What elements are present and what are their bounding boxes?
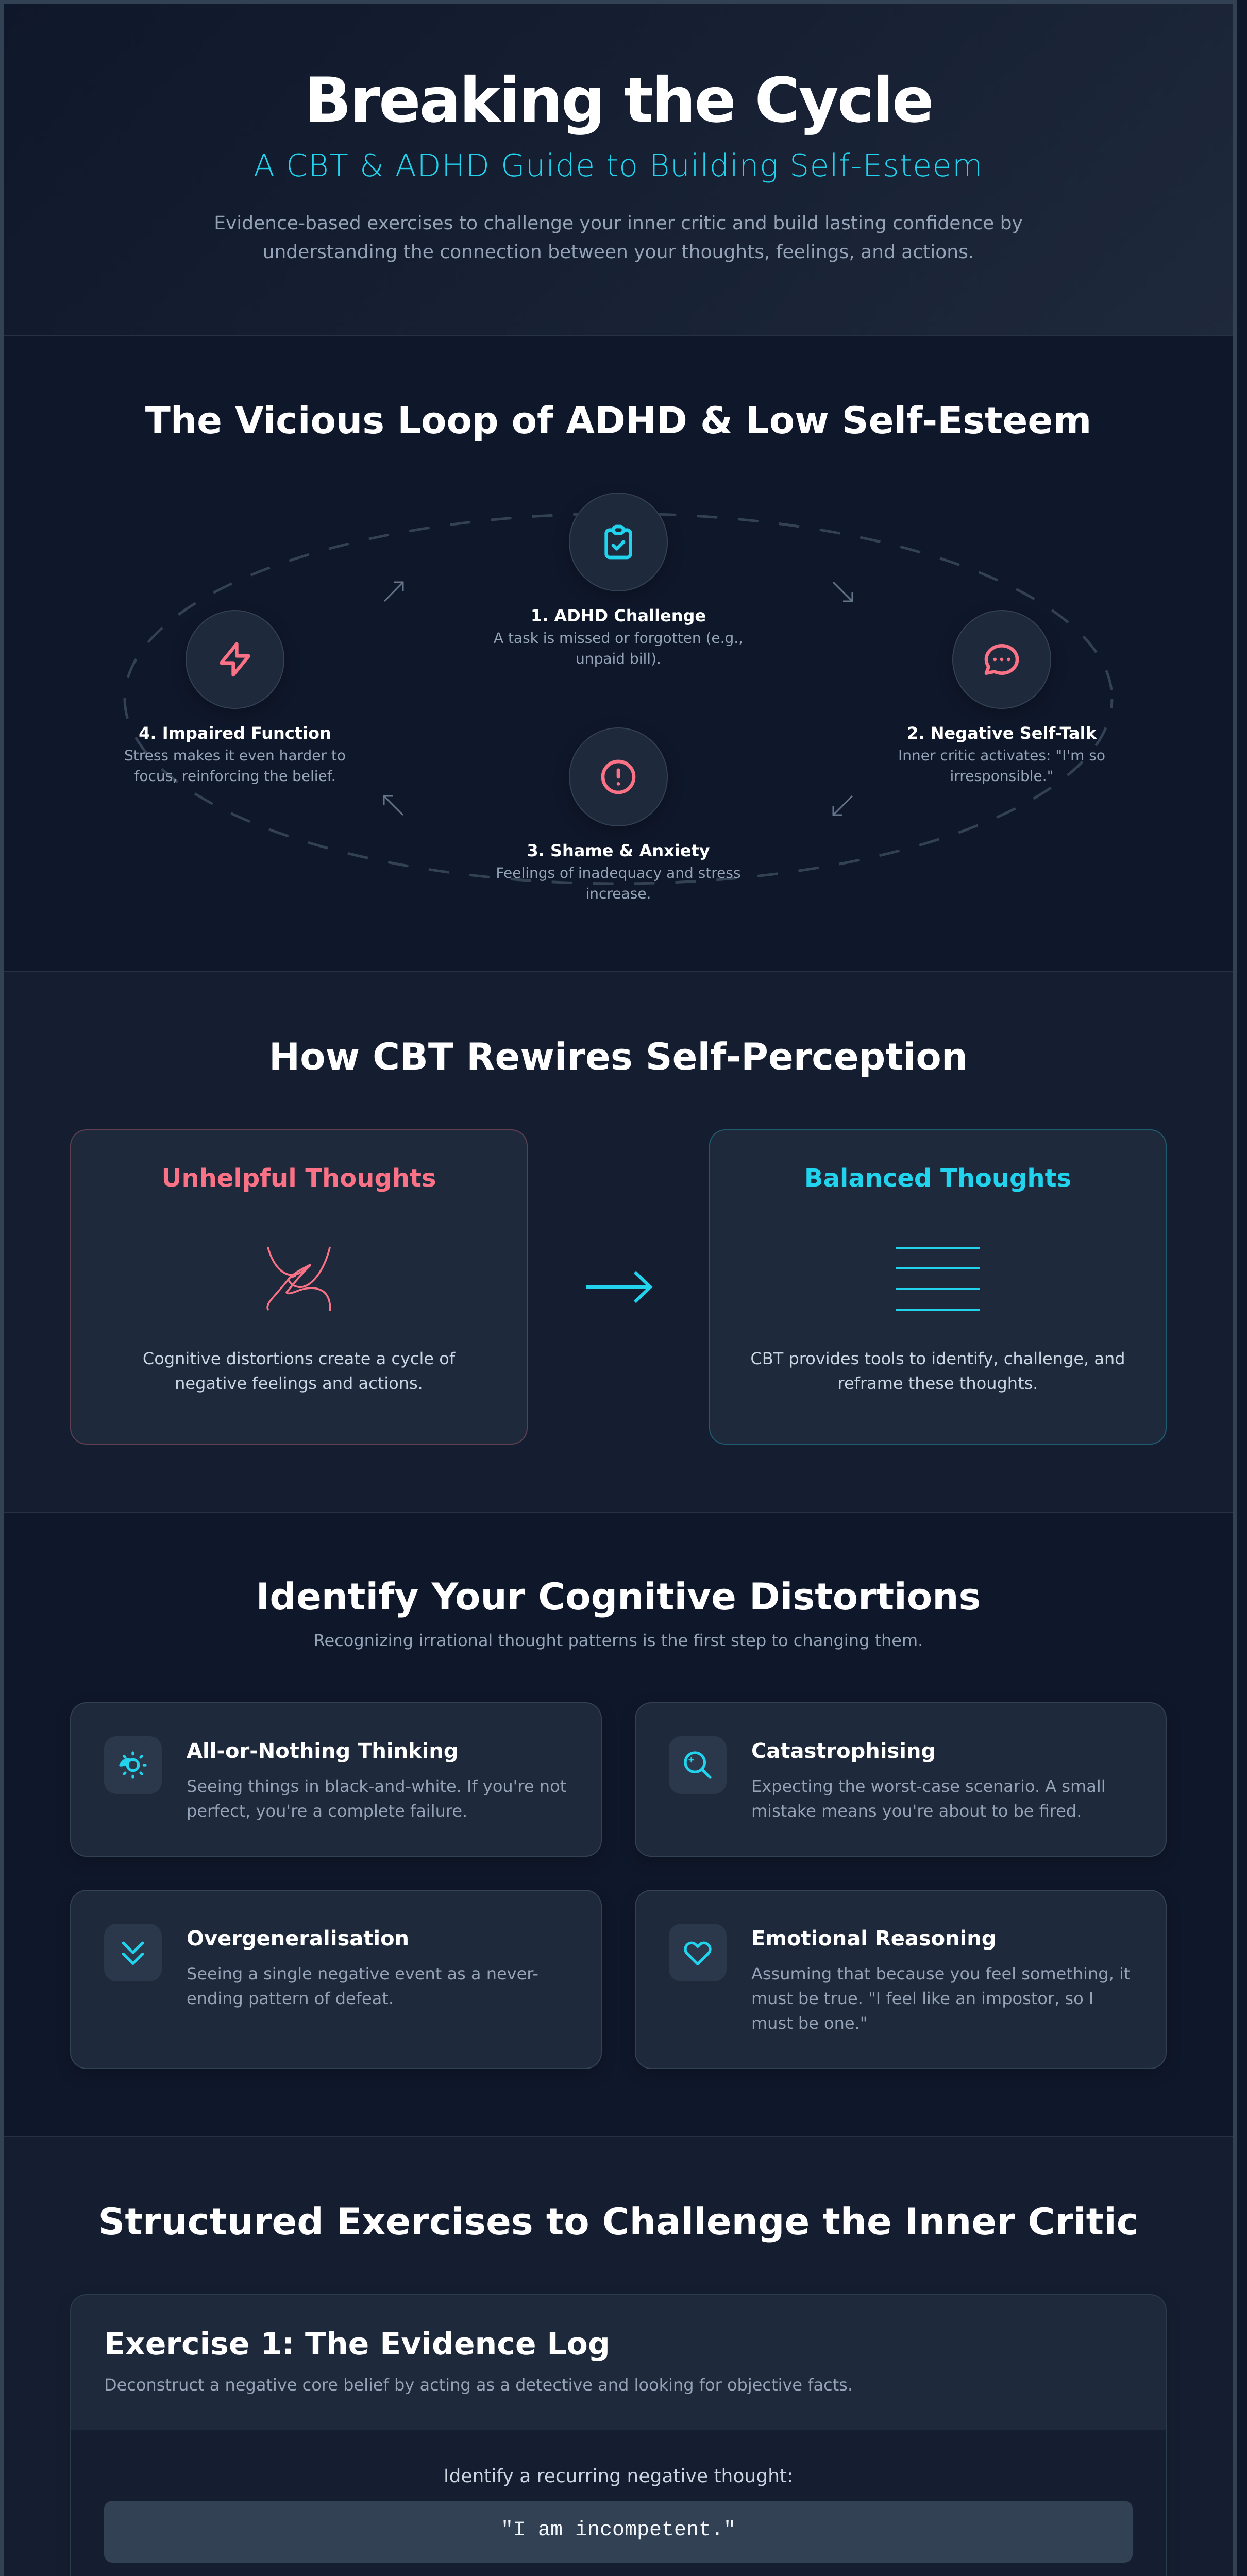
exercise 1: evidence log [70,2294,1167,2576]
exercise 1 description: Deconstruct a negative core belief by acting as a detective and looking for objective facts. [104,2375,853,2395]
subtitle: A CBT & ADHD Guide to Building Self-Esteem [254,148,983,184]
icon: double chevron [104,1924,162,1981]
negative thought box [104,2501,1133,2563]
panel: cognitive distortions [0,1513,1237,2137]
icon: half sun [104,1736,162,1794]
card text: Expecting the worst-case scenario. A small [751,1776,1106,1796]
panel: vicious loop [0,336,1237,972]
card: overgeneralisation [70,1890,602,2069]
card text: Assuming that because you feel something, it [751,1964,1130,1984]
step 4 text [124,747,346,785]
step 2 title: 2. Negative Self-Talk [907,723,1097,743]
step 4 text: Stress makes it even harder to [124,747,346,764]
card title: Catastrophising [751,1739,936,1763]
heading: exercises: Structured Exercises to Challenge the Inner Critic [98,2200,1138,2243]
card text: must be true. "I feel like an impostor, so I [751,1989,1093,2008]
card text: Seeing things in black-and-white. If you're not [187,1776,566,1796]
intro text: understanding the connection between your thoughts, feelings, and actions. [263,242,974,263]
card: catastrophising [635,1702,1167,1857]
intro text [214,213,1023,263]
step 1 title: 1. ADHD Challenge [531,606,706,625]
card text: Cognitive distortions create a cycle of [143,1349,455,1368]
card text: Seeing a single negative event as a never- [187,1964,538,1984]
step 4: impaired function [124,610,346,785]
card text: perfect, you're a complete failure. [187,1801,467,1821]
panel: how CBT rewires [0,972,1237,1513]
step 2: negative self-talk [898,610,1105,785]
step 3 title: 3. Shame & Anxiety [527,841,710,860]
step 2 text [898,747,1105,785]
icon: tangled scribble [266,1247,331,1311]
exercise 1 header [70,2294,1167,2430]
card: unhelpful thoughts [70,1129,528,1445]
card text: ending pattern of defeat. [187,1989,394,2008]
card text [751,1961,1130,2036]
arrow: step 3 to 4 [383,795,403,816]
step 1 text: A task is missed or forgotten (e.g., [494,630,743,647]
icon: exclamation circle [569,727,668,826]
step 3 text: Feelings of inadequacy and stress [496,865,741,882]
card heading: Unhelpful Thoughts [161,1164,436,1193]
card title: Emotional Reasoning [751,1927,996,1951]
heading: distortions: Identify Your Cognitive Distortions [256,1575,981,1618]
intro text: Evidence-based exercises to challenge your inner critic and build lasting confidence by [214,213,1023,234]
icon: chat bubble [952,610,1051,709]
arrow: step 4 to 1 [384,581,404,602]
loop diagram [124,493,1113,902]
step 1 text: unpaid bill). [576,650,661,667]
icon: lightning bolt [186,610,284,709]
heading: CBT: How CBT Rewires Self-Perception [269,1035,968,1078]
card title: All-or-Nothing Thinking [187,1739,458,1763]
icon: ordered lines [896,1247,980,1311]
step 1 text [494,630,743,667]
card text [187,1776,566,1821]
step 3: shame and anxiety [496,727,741,902]
step 3 text: increase. [586,885,651,902]
icon: clipboard check [569,493,668,591]
prompt: negative thought: Identify a recurring negative thought: [444,2466,793,2486]
card text: must be one." [751,2013,867,2033]
icon: heart [669,1924,727,1981]
panel: header [0,4,1237,336]
card text: reframe these thoughts. [838,1374,1038,1393]
step 4 text: focus, reinforcing the belief. [134,768,336,785]
card text [751,1776,1106,1821]
card: all-or-nothing [70,1702,602,1857]
card heading: Balanced Thoughts [804,1164,1071,1193]
card text: mistake means you're about to be fired. [751,1801,1082,1821]
arrow: unhelpful to balanced [586,1270,653,1303]
step 2 text: Inner critic activates: "I'm so [898,747,1105,764]
card: emotional reasoning [635,1890,1167,2069]
card: balanced thoughts [709,1129,1167,1445]
panel: structured exercises [0,2137,1237,2576]
step 4 title: 4. Impaired Function [139,723,331,743]
arrow: step 2 to 3 [833,795,853,816]
dashed loop ring [124,513,1113,885]
card title: Overgeneralisation [187,1927,409,1951]
card text [143,1349,456,1393]
step 2 text: irresponsible." [950,768,1054,785]
step 3 text [496,865,741,902]
icon: magnifier [669,1736,727,1794]
card text: negative feelings and actions. [175,1374,423,1393]
card text [187,1964,538,2008]
card text [750,1349,1125,1393]
heading: vicious loop: The Vicious Loop of ADHD & Low Self-Esteem [145,399,1091,442]
section subtitle: Recognizing irrational thought patterns is the first step to changing them. [314,1631,923,1650]
negative thought text: "I am incompetent." [501,2519,736,2542]
card text: CBT provides tools to identify, challenge, and [750,1349,1125,1368]
step 1: ADHD challenge [494,493,743,667]
exercise 1 title: Exercise 1: The Evidence Log [104,2326,610,2362]
title: Breaking the Cycle [305,65,932,137]
arrow: step 1 to 2 [833,582,853,602]
